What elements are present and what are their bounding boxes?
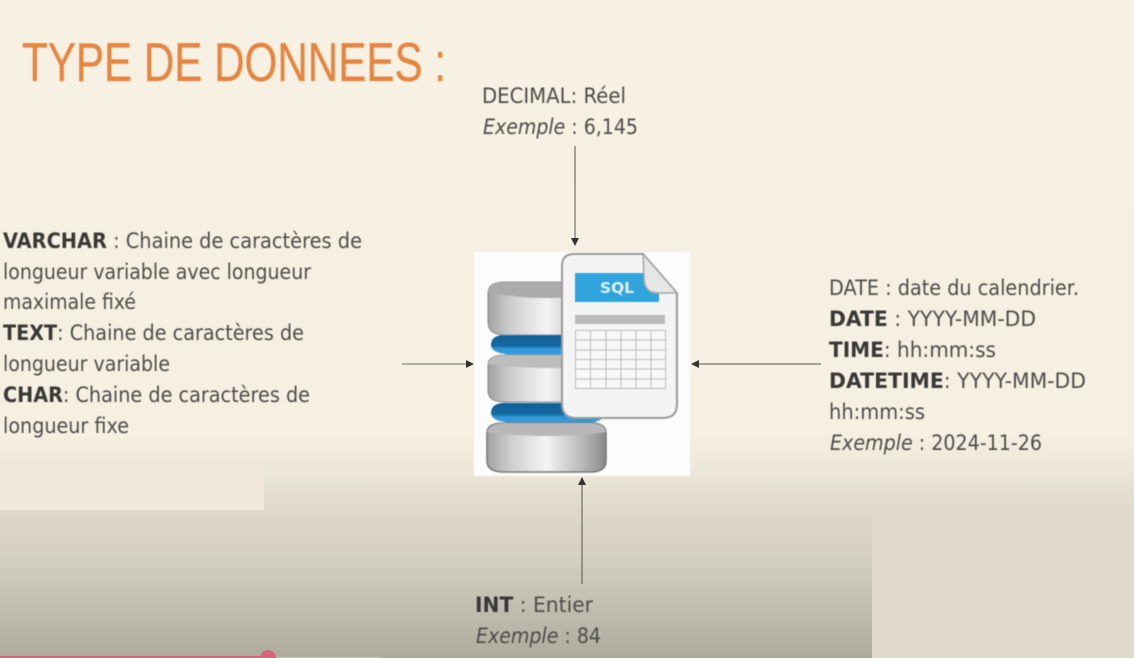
text block: DECIMAL: DECIMAL: Réel [482, 84, 626, 109]
text block: VARCHAR, TEXT, CHAR: longueur variable avec longueur [3, 260, 311, 285]
text block: VARCHAR, TEXT, CHAR: CHAR: Chaine de caractères de [3, 383, 310, 408]
text block: DECIMAL [482, 84, 638, 140]
SQL banner [575, 273, 659, 302]
text block: VARCHAR, TEXT, CHAR: longueur fixe [3, 414, 129, 439]
arrow: bottom [578, 477, 586, 584]
text block: INT [475, 593, 601, 649]
text block: DATE, TIME, DATETIME: DATETIME: YYYY-MM-DD [829, 369, 1086, 394]
arrow: right [691, 360, 821, 368]
arrow: top [571, 146, 579, 246]
text block: DECIMAL: Exemple : 6,145 [483, 115, 638, 140]
arrow: left [402, 360, 474, 368]
icon: SQL database [474, 252, 690, 476]
text block: DATE, TIME, DATETIME [829, 276, 1086, 456]
panel: right light patch [872, 510, 1134, 658]
text block: DATE, TIME, DATETIME: hh:mm:ss [829, 400, 925, 425]
text block: VARCHAR, TEXT, CHAR: TEXT: Chaine de caractères de [3, 321, 304, 346]
text block: VARCHAR, TEXT, CHAR: maximale fixé [3, 290, 136, 315]
text block: DATE, TIME, DATETIME: TIME: hh:mm:ss [829, 338, 996, 363]
data table [575, 330, 666, 389]
text block: INT: Exemple : 84 [476, 624, 601, 649]
text block: DATE, TIME, DATETIME: DATE : YYYY-MM-DD [829, 307, 1036, 332]
text block: DATE, TIME, DATETIME: DATE : date du calendrier. [829, 276, 1079, 301]
text block: DATE, TIME, DATETIME: Exemple : 2024-11-26 [830, 431, 1042, 456]
panel: left light patch [0, 464, 264, 510]
text block: VARCHAR, TEXT, CHAR [3, 229, 362, 439]
SQL banner: SQL [600, 279, 634, 297]
text block: INT: INT : Entier [475, 593, 593, 618]
video progress bar [0, 650, 380, 658]
text block: VARCHAR, TEXT, CHAR: longueur variable [3, 352, 170, 377]
icon: SQL document [562, 254, 677, 418]
icon: database cylinders [487, 282, 608, 472]
title: TYPE DE DONNEES : [22, 31, 446, 93]
text block: VARCHAR, TEXT, CHAR: VARCHAR : Chaine de caractères de [3, 229, 362, 254]
